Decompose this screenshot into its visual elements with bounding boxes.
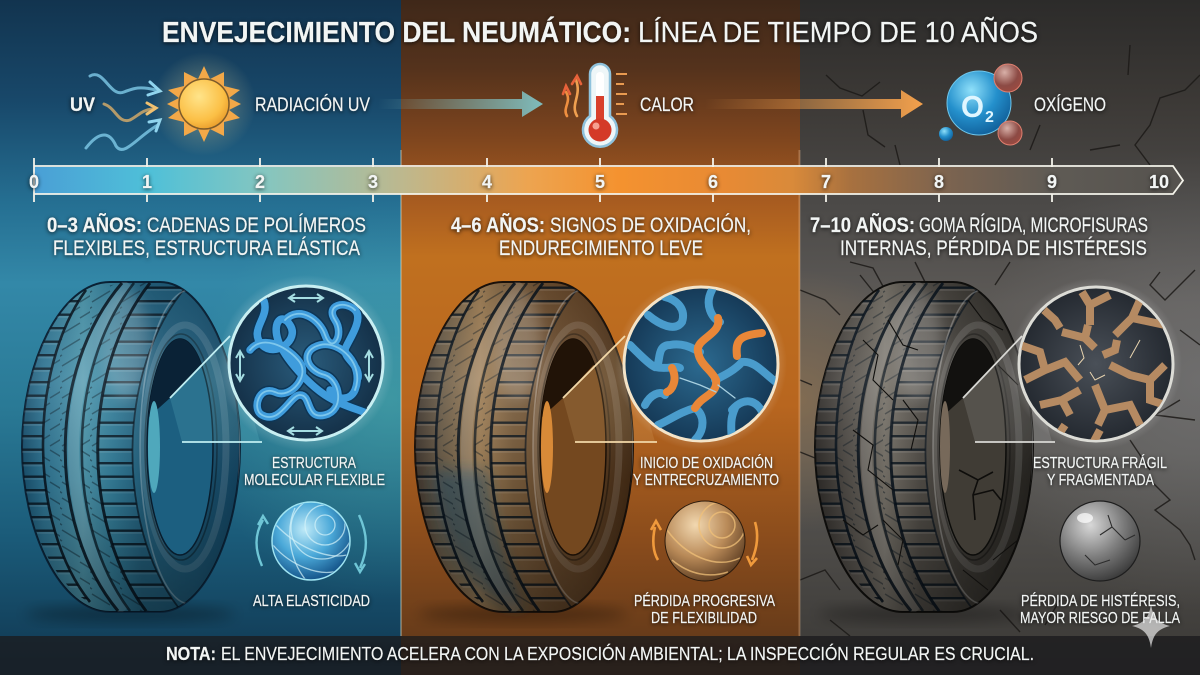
panel content: 0-3 years bbox=[22, 275, 394, 622]
timeline numbers: 9 bbox=[1047, 172, 1057, 192]
panel content: 4-6 years bbox=[415, 278, 787, 627]
heading: 7-10 years bbox=[810, 214, 1148, 260]
timeline numbers: 6 bbox=[708, 172, 718, 192]
icon: O2 molecule: O bbox=[961, 89, 984, 124]
label: flexible molecular structure: MOLECULAR FLEXIBLE bbox=[244, 472, 385, 489]
label: progressive flexibility loss: PÉRDIDA PROGRESIVA bbox=[634, 591, 775, 610]
heading: 0-3 years: FLEXIBLES, ESTRUCTURA ELÁSTICA bbox=[53, 237, 360, 260]
icon: heat waves bbox=[563, 76, 581, 116]
icon: sun bbox=[152, 52, 256, 156]
icon: UV rays bbox=[86, 75, 160, 149]
timeline numbers: 10 bbox=[1149, 172, 1169, 192]
note text: EL ENVEJECIMIENTO ACELERA CON LA EXPOSICIÓN AMBIENTAL; LA INSPECCIÓN REGULAR ES CRUCIAL. bbox=[221, 643, 1034, 664]
arrow: UV to heat bbox=[378, 91, 543, 117]
callout beam bbox=[170, 336, 262, 442]
label: calor: CALOR bbox=[640, 95, 694, 116]
icon: O2 molecule: 2 bbox=[985, 109, 994, 126]
label: flexible molecular structure: ESTRUCTURA bbox=[272, 455, 356, 472]
label: oxidation start bbox=[633, 453, 779, 489]
panel: 0-3 years background bbox=[0, 0, 401, 675]
heading: 0-3 years: 0–3 AÑOS: bbox=[47, 214, 142, 237]
title: ENVEJECIMIENTO DEL NEUMÁTICO: bbox=[162, 15, 631, 49]
timeline numbers: 8 bbox=[934, 172, 944, 192]
label: radiación UV: RADIACIÓN UV bbox=[255, 94, 370, 116]
timeline bbox=[29, 158, 1183, 202]
panel: 7-10 years background bbox=[800, 0, 1200, 675]
timeline numbers: 7 bbox=[821, 172, 831, 192]
icon: cracked ball bbox=[1060, 501, 1140, 581]
heading: 4-6 years bbox=[451, 214, 751, 260]
detail circle: flexible polymer chains bbox=[218, 275, 394, 451]
label: flexible molecular structure bbox=[244, 455, 385, 489]
timeline numbers: 0 bbox=[29, 172, 39, 192]
heading: 4-6 years: SIGNOS DE OXIDACIÓN, bbox=[550, 214, 751, 237]
detail circle: fragmented structure bbox=[1010, 278, 1182, 450]
title bbox=[162, 15, 1038, 49]
icon: O2 molecule bbox=[939, 64, 1022, 145]
heading: 7-10 years: 7–10 AÑOS: bbox=[810, 214, 915, 237]
timeline numbers: 2 bbox=[255, 172, 265, 192]
label: hysteresis loss, failure risk bbox=[1020, 591, 1180, 627]
heading: 0-3 years bbox=[47, 214, 366, 260]
icon: stiffening ball bbox=[651, 501, 757, 581]
label: brittle structure: Y FRAGMENTADA bbox=[1047, 472, 1154, 489]
tire: aged and cracked bbox=[815, 282, 1033, 622]
factor row: UV bbox=[70, 52, 370, 156]
heading: 4-6 years: ENDURECIMIENTO LEVE bbox=[499, 237, 703, 260]
heading: 4-6 years: 4–6 AÑOS: bbox=[451, 214, 545, 237]
label: oxidation start: Y ENTRECRUZAMIENTO bbox=[633, 472, 779, 489]
detail circle: early oxidation and cross-linking bbox=[615, 278, 787, 450]
icon: thermometer bbox=[583, 64, 627, 147]
timeline numbers: 1 bbox=[142, 172, 152, 192]
label: high elasticity: ALTA ELASTICIDAD bbox=[253, 593, 370, 610]
callout beam bbox=[563, 336, 657, 442]
timeline bar bbox=[34, 167, 1183, 194]
timeline numbers: 5 bbox=[595, 172, 605, 192]
factor row: heat bbox=[563, 64, 694, 147]
label: brittle structure: ESTRUCTURA FRÁGIL bbox=[1033, 453, 1167, 472]
panel content: 7-10 years bbox=[815, 278, 1182, 627]
panel: 4-6 years background bbox=[401, 0, 800, 675]
label: oxígeno: OXÍGENO bbox=[1034, 95, 1106, 116]
timeline numbers: 4 bbox=[482, 172, 492, 192]
callout beam bbox=[963, 336, 1055, 442]
label: oxidation start: INICIO DE OXIDACIÓN bbox=[640, 453, 773, 472]
panel dividers bbox=[400, 150, 800, 636]
icon: elastic ball bbox=[256, 497, 366, 580]
label: progressive flexibility loss: DE FLEXIBILIDAD bbox=[651, 610, 757, 627]
label: UV: UV bbox=[70, 95, 95, 116]
timeline numbers: 3 bbox=[368, 172, 378, 192]
note text: NOTA: bbox=[166, 644, 216, 664]
arrow: heat to oxygen bbox=[705, 90, 923, 118]
note bar bbox=[0, 636, 1200, 675]
heading: 0-3 years: CADENAS DE POLÍMEROS bbox=[147, 214, 366, 237]
tire: new bbox=[22, 282, 240, 622]
tire: mid-aged bbox=[415, 282, 633, 622]
timeline numbers bbox=[29, 172, 1169, 192]
timeline rails and ticks bbox=[34, 158, 1183, 202]
watermark star bbox=[1132, 604, 1170, 648]
title: LÍNEA DE TIEMPO DE 10 AÑOS bbox=[638, 15, 1038, 49]
label: brittle structure bbox=[1033, 453, 1167, 489]
label: progressive flexibility loss bbox=[634, 591, 775, 627]
factor row: oxygen bbox=[939, 64, 1106, 145]
